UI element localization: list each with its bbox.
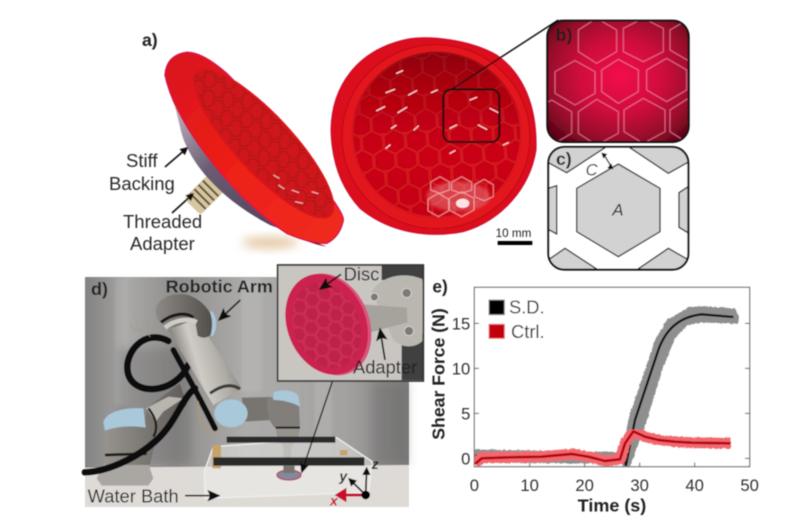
S.D. band and line [474,306,739,467]
label Adapter: Adapter [353,356,417,377]
arrow to disc [320,274,341,289]
axes triad: y [338,468,348,484]
adapter bolts [370,288,414,336]
plot frame [474,287,750,467]
cables [85,317,218,472]
central hexagon [577,164,660,257]
disc edge [274,261,386,388]
panel c: hexagon geometry [543,143,693,273]
Ctrl. band and line [475,431,731,464]
y tick labels: 5 [461,404,470,423]
label Disc: Disc [344,263,379,284]
axes triad [329,456,379,509]
zoom connector line [452,20,558,89]
glare hexagons [428,177,493,217]
arrow to water bath [185,493,219,498]
specular marks on face [273,175,318,203]
disc rim [165,52,343,243]
x tick labels: 30 [630,476,649,495]
robot shoulder [105,383,187,465]
lighting on hex field [351,52,522,218]
x tick labels: 50 [740,476,759,495]
dark red underside [178,110,327,247]
label d: d) [91,279,108,299]
tool flange [276,428,300,465]
water bath [204,438,372,498]
disc face [271,261,383,387]
shoulder blue cap [103,408,146,431]
ticks [474,323,750,467]
shadow under disc [242,237,298,249]
disc on flange [277,470,301,480]
label b: b) [556,25,572,45]
rim ring [342,45,530,229]
label A: A [611,201,623,220]
y axis title: Shear Force (N) [428,308,448,440]
label: stiff backing [109,150,202,254]
label c: c) [556,149,572,169]
table [85,465,409,507]
legend [489,296,545,342]
rear bar [227,437,335,443]
arrow to adapter [380,329,385,360]
dark corners [382,265,423,380]
x axis title: Time (s) [578,496,646,516]
y tick labels: 10 [452,359,470,378]
label Water Bath: Water Bath [88,485,179,506]
glare at bottom [427,182,490,212]
arm top blue edge [211,312,215,336]
tape marks [212,445,347,468]
panel: front view of disc [331,18,710,273]
adapter shaft [362,304,408,333]
label: stiff backing: Backing [109,173,175,194]
photo background [85,277,409,507]
arm top joint [156,294,214,338]
panel e: shear force chart [428,277,759,516]
y tick labels: 15 [452,314,470,333]
label: stiff backing: Stiff [126,150,158,171]
zoom region box [443,89,499,142]
panel d: robotic arm photo [85,261,423,509]
forearm [242,397,272,422]
y tick labels: 0 [461,449,470,468]
hexagon field [351,52,522,218]
robot base [97,463,153,486]
x tick labels: 20 [575,476,594,495]
panel b: hexagon close-up [546,18,690,144]
specular dashes [377,71,508,153]
x tick labels [470,476,759,495]
disc rim [331,38,536,234]
wrist blue cap [273,390,300,407]
front bar [213,457,364,466]
stiff backing [173,100,327,247]
arrow to robotic arm [219,300,240,320]
x tick labels: 0 [470,476,479,495]
arm collar [161,314,193,322]
adapter plate [372,275,422,346]
curtain folds [115,278,332,443]
surrounding hexagon segments [548,147,688,270]
long arm [168,318,242,405]
elbow blue cap [214,399,248,427]
label a: a) [142,30,158,50]
arrows: backing and adapter [165,148,193,213]
legend: Ctrl. [511,321,545,342]
close-up hexagons [548,20,688,142]
label e: e) [432,277,448,297]
y tick labels [452,314,470,468]
label: stiff backing: Threaded [123,211,202,232]
dimension arrow C [601,153,613,169]
photo shading [118,348,408,465]
label Robotic Arm: Robotic Arm [166,276,273,296]
scale bar: 10 mm: 10 mm [496,227,531,240]
label: stiff backing: Adapter [130,233,195,254]
inset: disc close-up [271,261,423,388]
panel a: side view of disc [142,30,353,249]
wrist [267,397,300,428]
x tick labels: 40 [685,476,704,495]
axes triad: z [371,456,379,472]
x tick labels: 10 [520,476,539,495]
connector from inset to disc [302,382,332,472]
axes triad: x [329,493,339,509]
disc face with hexagons [174,51,353,236]
threaded adapter [184,175,224,215]
legend: S.D. [509,296,545,317]
label C: C [586,160,599,179]
